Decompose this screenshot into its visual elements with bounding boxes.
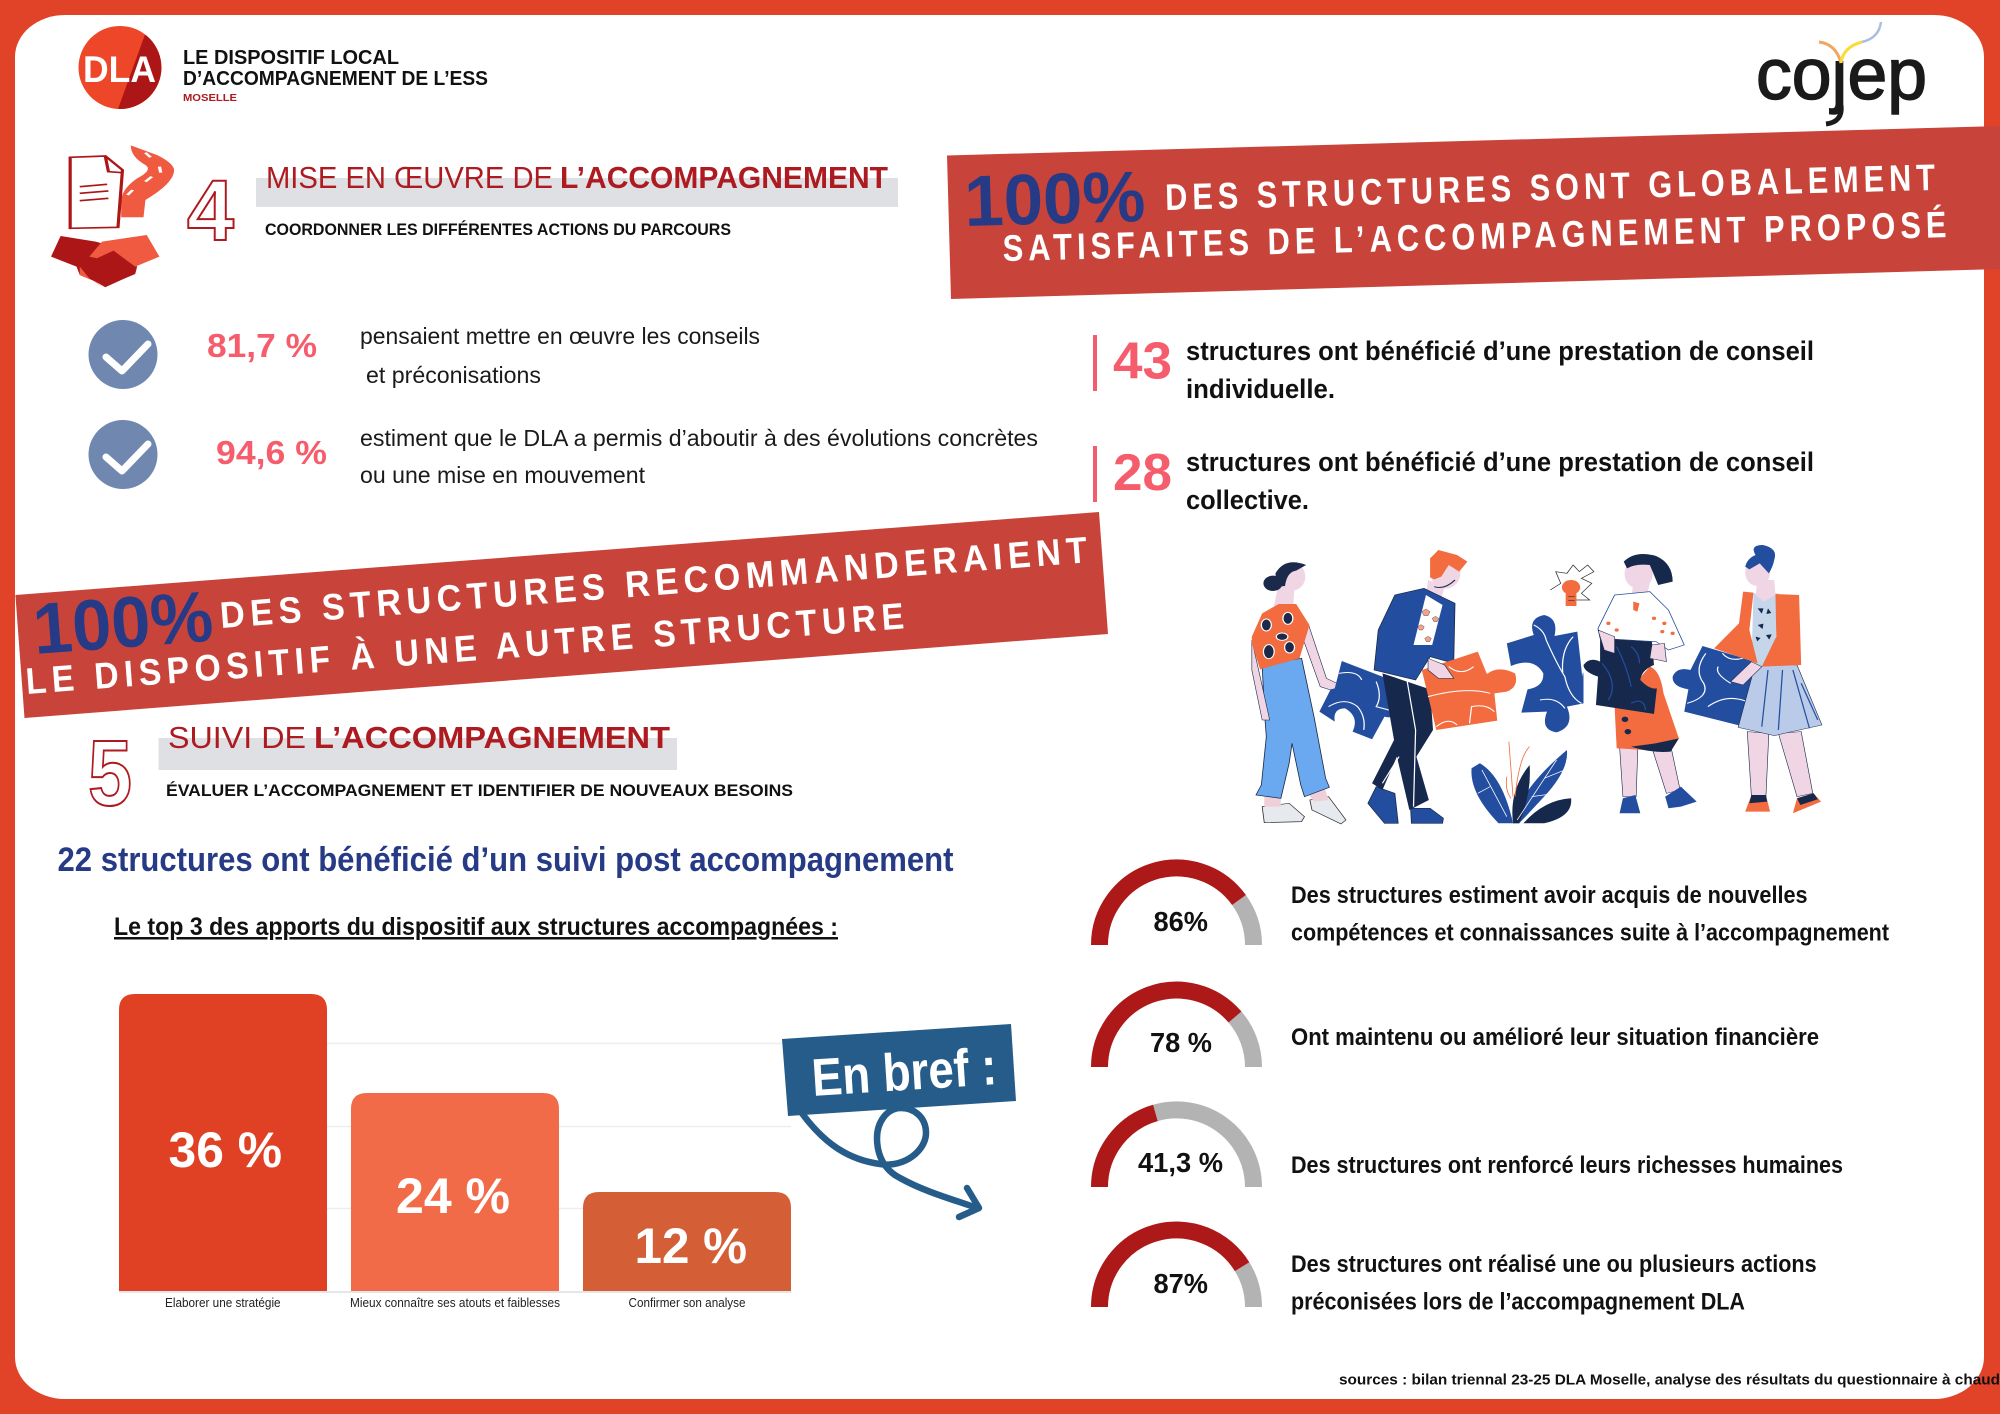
stat: 28 structures [1093, 444, 1814, 515]
callout: En bref [782, 1024, 1016, 1116]
bar: Confirmer son analyse [583, 1192, 791, 1310]
gauge: 86% [1100, 868, 1889, 947]
section 4 heading: COORDONNER LES DIFFÉRENTES ACTIONS DU PARCOURS [265, 220, 731, 239]
DLA logo: D’ACCOMPAGNEMENT DE L’ESS [183, 68, 488, 90]
gauge: 86%: 86% [1154, 906, 1208, 937]
plant [1471, 742, 1571, 823]
gauge: 78 % [1100, 990, 1819, 1067]
heading: suivi post accompagnement: 22 structures ont bénéficié d’un suivi post accompagnement [58, 841, 954, 879]
bar: Mieux connaître: Mieux connaître ses atouts et faiblesses [350, 1296, 560, 1310]
banner: 100% recommanderaient [15, 512, 1108, 718]
figure: woman in orange top [1252, 562, 1354, 824]
banner: 100% recommanderaient: LE DISPOSITIF À UNE AUTRE STRUCTURE [24, 595, 911, 702]
gauge: 86%: compétences et connaissances suite à l’accompagnement [1291, 920, 1889, 947]
section 5 heading [159, 720, 793, 800]
sources note: sources : bilan triennal 23-25 DLA Moselle, analyse des résultats du questionnaire à chaud [1339, 1373, 2000, 1389]
section 4 heading [256, 160, 898, 239]
puzzle piece: orange [1422, 652, 1516, 730]
gauge: 86%: Des structures estiment avoir acquis de nouvelles [1291, 882, 1808, 909]
DLA logo: LE DISPOSITIF LOCAL [183, 47, 399, 69]
stat: 81,7 %: et préconisations [366, 362, 541, 388]
stat: 81,7 %: 81,7 % [207, 327, 317, 364]
stat: 28 structures: collective. [1186, 485, 1309, 515]
gauge: 87%: Des structures ont réalisé une ou plusieurs actions [1291, 1251, 1817, 1278]
icon: light bulb [1550, 565, 1594, 606]
stat: 43 structures [1093, 333, 1814, 404]
DLA logo [78, 26, 488, 109]
puzzle piece: right blue [1673, 646, 1756, 727]
Cojep logo: cojep [1756, 35, 1927, 115]
figure: woman with dark puzzle [1584, 554, 1697, 813]
section 5 heading: L’ACCOMPAGNEMENT [314, 720, 670, 755]
puzzle piece: left blue [1319, 661, 1402, 739]
puzzle piece: centre blue [1507, 615, 1584, 732]
section 4 heading: L’ACCOMPAGNEMENT [560, 160, 888, 195]
stat: 28 structures: 28 [1113, 444, 1172, 502]
stat: 43 structures: structures ont bénéficié d’une prestation de conseil [1186, 336, 1814, 366]
stat: 94,6 %: ou une mise en mouvement [360, 462, 646, 488]
stat: 43 structures: individuelle. [1186, 374, 1335, 404]
callout: En bref: En bref : [810, 1037, 998, 1108]
bar: Mieux connaître [350, 1093, 560, 1310]
gauge: 41,3 % [1100, 1110, 1843, 1187]
gauge: 87% [1100, 1230, 1817, 1316]
DLA logo: MOSELLE [183, 93, 237, 104]
stat: 28 structures: structures ont bénéficié d’une prestation de conseil [1186, 447, 1814, 477]
figure: man in blue jacket [1368, 550, 1467, 823]
illustration: people assembling a puzzle [1252, 545, 1822, 824]
gauge: 41,3 %: 41,3 % [1138, 1147, 1223, 1178]
chart heading: Le top 3 des apports du dispositif aux structures accompagnées : [114, 913, 838, 941]
stat: 81,7 %: pensaient mettre en œuvre les conseils [360, 323, 760, 349]
section 5 heading: SUIVI DE [168, 720, 306, 755]
bar: Confirmer son analyse: Confirmer son analyse [628, 1296, 746, 1310]
gauge: 41,3 %: Des structures ont renforcé leurs richesses humaines [1291, 1152, 1843, 1179]
stat: 94,6 % [88, 420, 1038, 489]
gauge: 78 %: Ont maintenu ou amélioré leur situation financière [1291, 1024, 1819, 1051]
gauge: 78 %: 78 % [1150, 1027, 1212, 1058]
stat: 94,6 %: estiment que le DLA a permis d’aboutir à des évolutions concrètes [360, 425, 1038, 451]
DLA logo: DLA [83, 49, 156, 90]
gauge: 87%: 87% [1154, 1268, 1208, 1299]
bar: Confirmer son analyse: 12 % [634, 1218, 747, 1274]
figure: woman in orange jacket [1714, 545, 1822, 813]
bar: Mieux connaître: 24 % [396, 1168, 510, 1224]
bar: Elaborer une stratégie [119, 994, 327, 1310]
arrow: looped arrow from En bref [801, 1108, 979, 1217]
bar chart [119, 994, 791, 1310]
stat: 81,7 % [88, 320, 760, 389]
banner: 100% satisfaites [947, 126, 2000, 299]
gauge: 87%: préconisées lors de l’accompagnement DLA [1291, 1289, 1745, 1316]
banner: 100% recommanderaient: DES STRUCTURES RECOMMANDERAIENT [219, 529, 1094, 636]
stat: 43 structures: 43 [1113, 333, 1172, 391]
bar: Elaborer une stratégie: Elaborer une stratégie [165, 1296, 281, 1310]
stat: 94,6 %: 94,6 % [216, 434, 327, 471]
section 5 number: 5 [88, 721, 132, 825]
section 4 heading: MISE EN ŒUVRE DE [266, 160, 553, 195]
section 5 heading: ÉVALUER L’ACCOMPAGNEMENT ET IDENTIFIER DE NOUVEAUX BESOINS [166, 781, 793, 800]
bar: Elaborer une stratégie: 36 % [168, 1122, 282, 1178]
section 4 number: 4 [187, 163, 234, 259]
banner: 100% recommanderaient: 100% [30, 577, 216, 670]
banner: 100% satisfaites: 100% [963, 157, 1146, 242]
icon: document, road and handshake [51, 145, 174, 287]
